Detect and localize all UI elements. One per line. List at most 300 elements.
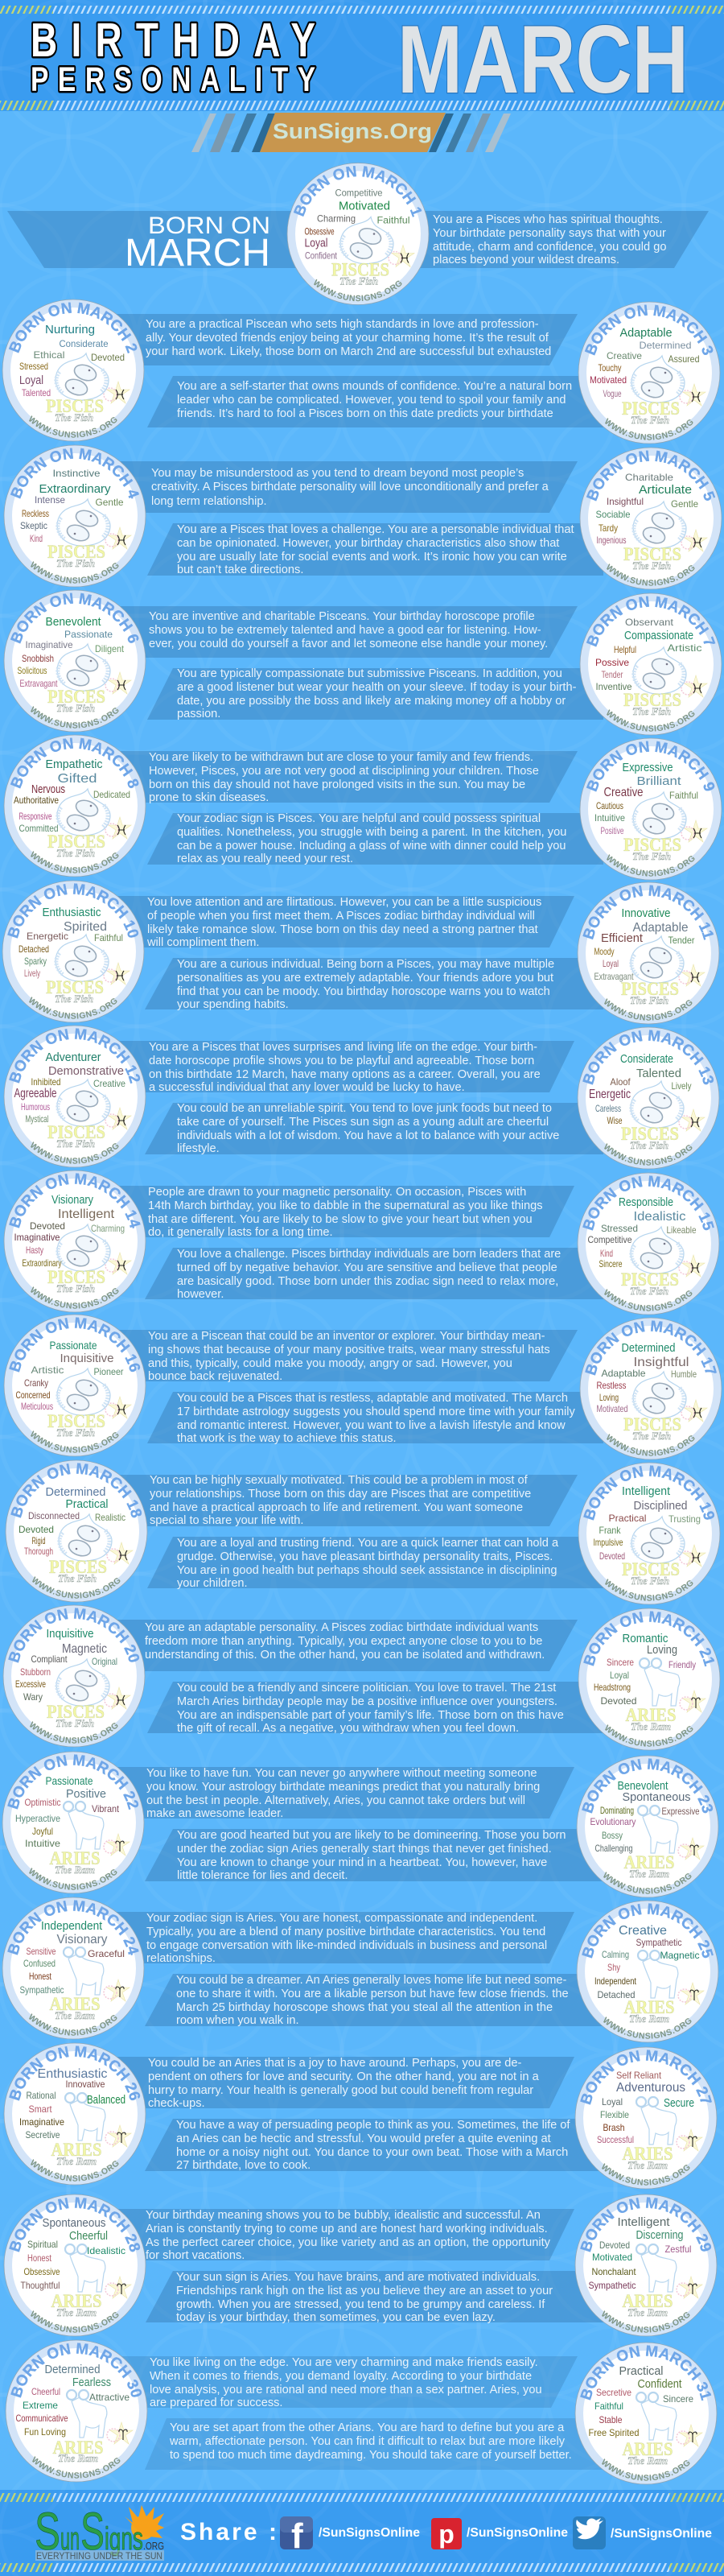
medallion: March 14: The Fish [56, 1282, 95, 1294]
panel: March 1 intro: Your birthdate personality says that with your [433, 227, 666, 240]
traits: Adaptable [632, 921, 689, 935]
panel: March 13 text: lifestyle. [177, 1142, 220, 1155]
panel: March 28 text: Your birthday meaning shows you to be bubbly, idealistic and successful. An [146, 2209, 541, 2222]
panel: March 11 text: your spending habits. [177, 998, 289, 1011]
panel: March 24 text: Typically, you are a blend of many positive birthdate characteristics. You tend [146, 1926, 545, 1938]
traits: Extraordinary [39, 482, 111, 496]
traits: Spirited [64, 920, 107, 934]
traits: Diligent [95, 643, 125, 654]
traits: Stubborn [20, 1666, 51, 1678]
panel: March 20 text [117, 1620, 578, 1671]
traits: Expressive [661, 1806, 700, 1817]
panel: March 22 text: make an awesome leader. [146, 1807, 283, 1820]
traits: Brash [603, 2122, 624, 2133]
traits: Considerate [620, 1052, 673, 1066]
traits [595, 617, 701, 692]
medallion: March 14: WWW.SUNSIGNS.ORG [31, 1286, 119, 1309]
traits: Practical [66, 1497, 108, 1511]
traits: Brilliant [637, 774, 681, 788]
medallion: March 10 [2, 881, 145, 1022]
medallion: March 31: The Ram [627, 2454, 668, 2467]
traits: Frank [599, 1525, 621, 1536]
traits [19, 1485, 125, 1557]
traits: Fun Loving [24, 2426, 66, 2438]
panel: March 17 text: and romantic interest. However, you want to live a lavish lifestyle and know [177, 1419, 566, 1432]
traits: Agreeable [14, 1087, 57, 1100]
medallion: March 8: The Fish [56, 847, 95, 859]
traits: Imaginative [26, 639, 73, 650]
traits: Discerning [636, 2228, 684, 2242]
medallion: March 12: PISCES [47, 1122, 105, 1142]
panel: March 10 text: will compliment them. [146, 936, 259, 949]
medallion: March 25: ARIES [624, 1997, 675, 2017]
traits: Shy [607, 1962, 620, 1973]
panel: March 3 text: You are a self-starter that owns mounds of confidence. You’re a natural born [177, 380, 572, 393]
panel: March 17 text: that work is the way to achieve this status. [177, 1432, 397, 1445]
panel: March 19 text: You are a loyal and trusting friend. You are a quick learner that can hold a [177, 1537, 559, 1550]
panel: March 24 text: Your zodiac sign is Aries. You are honest, compassionate and independent. [146, 1912, 537, 1925]
traits: Zestful [664, 2244, 692, 2255]
traits: Determined [45, 1485, 106, 1499]
panel: March 24 text [117, 1912, 574, 1965]
traits: Humorous [21, 1101, 50, 1113]
panel: March 7 text: date, you are possibly the boss and likely are making money off a hobby or [177, 695, 566, 708]
traits: Cheerful [31, 2386, 60, 2397]
medallion: March 12: The Fish [56, 1137, 95, 1150]
traits: Committed [19, 823, 58, 834]
traits [14, 1193, 125, 1269]
medallion: March 19: BORN ON MARCH 19 [583, 1465, 714, 1521]
title: Birthday Personality: BIRTHDAY [31, 14, 315, 67]
panel: March 7 text: are a good listener but wear your health on your sleeve. If today is your birth- [177, 681, 577, 694]
traits: Inquisitive [60, 1352, 114, 1365]
medallion: March 12: BORN ON MARCH 12 [9, 1028, 140, 1084]
panel: March 18 text: your relationships. Those born on this day are Pisces that are competitive [150, 1488, 531, 1501]
traits: Stable [599, 2414, 623, 2425]
medallion: March 11: WWW.SUNSIGNS.ORG [604, 998, 692, 1021]
medallion: March 6: The Fish [56, 702, 95, 714]
traits [589, 1052, 692, 1126]
traits: Kind [30, 533, 43, 544]
panel: March 29 text: growth. When you are stressed, you tend to be grumpy and careless. If [176, 2298, 545, 2311]
panel: March 29 text [146, 2271, 603, 2324]
panel: March 28 text: Arian is constantly trying to come up and are honest hard working individuals. [146, 2223, 548, 2235]
traits: Humble [671, 1368, 697, 1380]
icon: twitter [573, 2516, 606, 2549]
medallion: March 2 [2, 299, 145, 441]
traits: Energetic [27, 931, 68, 942]
medallion: March 7 [579, 592, 722, 736]
medallion: March 13 [578, 1027, 719, 1169]
medallion: March 7: PISCES [623, 690, 681, 710]
medallion: March 9: BORN ON MARCH 9 [586, 741, 714, 792]
medallion: March 6: PISCES [47, 687, 105, 707]
panel: March 20 text: You are an adaptable personality. A Pisces zodiac birthdate individual wants [145, 1621, 538, 1634]
panel: March 6 text: ever, you could do yourself a favor and let someone else handle your money. [149, 638, 548, 650]
panel: March 16 text: ing shows that because of your many positive traits, wear many stressful hats [148, 1344, 550, 1356]
traits: Vibrant [92, 1803, 120, 1814]
medallion: March 11: The Fish [630, 994, 668, 1006]
traits: Enthusiastic [42, 906, 101, 919]
panel: March 2 text: You are a practical Piscean who sets high standards in love and profession- [146, 318, 539, 331]
panel: March 16 text: You are a Piscean that could be an inventor or explorer. Your birthday mean- [148, 1330, 545, 1343]
medallion: March 9: WWW.SUNSIGNS.ORG [607, 854, 695, 877]
medallion: March 27: The Ram [627, 2159, 668, 2171]
medallion: March 18 [5, 1460, 148, 1602]
medallion: March 30 [6, 2340, 147, 2482]
panel: March 17 text [147, 1392, 603, 1445]
traits: Hasty [26, 1245, 43, 1256]
panel: March 20 text: freedom more than anything. Typically, you expect anyone close to you to be [145, 1635, 542, 1648]
panel: March 15 text: You love a challenge. Pisces birthday individuals are born leaders that are [177, 1248, 561, 1261]
medallion: March 4: The Fish [56, 557, 95, 569]
medallion: March 1 [286, 163, 430, 305]
medallion: March 19 [578, 1462, 721, 1605]
traits: Imaginative [14, 1232, 60, 1243]
traits: Charming [91, 1223, 125, 1234]
traits: Extreme [23, 2400, 58, 2411]
panel: March 10 text: of people when you first meet them. A Pisces zodiac birthday individual will [147, 910, 535, 923]
panel: March 12 text: a successful individual that any lover would be lucky to have. [149, 1081, 465, 1094]
medallion: March 10: The Fish [55, 993, 93, 1005]
traits: Confident [305, 250, 338, 261]
traits: Gentle [671, 498, 698, 510]
medallion: March 29 [575, 2194, 717, 2336]
traits: Lively [24, 968, 40, 979]
traits: Motivated [590, 374, 627, 386]
traits: Evolutionary [590, 1816, 636, 1827]
traits: Practical [619, 2364, 663, 2378]
traits [590, 326, 700, 399]
logo: SunSigns.org: Signs [80, 2501, 143, 2561]
medallion: March 18: The Fish [58, 1572, 97, 1584]
panel: March 15 text: however. [177, 1288, 224, 1301]
traits [595, 472, 698, 546]
traits: Disconnected [28, 1510, 80, 1521]
traits [15, 1627, 117, 1703]
traits: Motivated [597, 1403, 627, 1414]
traits: Inventive [595, 681, 632, 692]
panel: March 27 text: home or a noisy night out. You dance to your own beat. Those with a March [176, 2146, 568, 2159]
traits: Loyal [603, 958, 619, 969]
panel: March 21 text: March Aries birthday people may be a positive influence over youngsters. [177, 1695, 557, 1708]
traits: Secure [664, 2096, 694, 2110]
medallion: March 8: BORN ON MARCH 8 [10, 737, 138, 789]
traits: Independent [41, 1919, 103, 1933]
medallion: March 20: WWW.SUNSIGNS.ORG [30, 1721, 117, 1744]
traits [14, 758, 130, 834]
medallion: March 9: The Fish [632, 850, 671, 862]
panel: March 10 text [117, 896, 574, 949]
panel: March 23 text [145, 1829, 603, 1882]
medallion: March 13: BORN ON MARCH 13 [582, 1030, 714, 1085]
traits: Detached [19, 943, 49, 955]
traits: Positive [600, 825, 624, 836]
panel: March 19 text [147, 1537, 603, 1590]
medallion: March 6: WWW.SUNSIGNS.ORG [31, 706, 119, 729]
medallion: March 21: WWW.SUNSIGNS.ORG [603, 1724, 696, 1749]
traits: Idealistic [634, 1210, 685, 1224]
panel: March 21 text [147, 1682, 603, 1735]
medallion: March 28: BORN ON MARCH 28 [6, 2194, 143, 2254]
traits: Joyful [32, 1826, 53, 1837]
medallion: March 15: PISCES [621, 1269, 679, 1290]
traits: Innovative [621, 906, 671, 920]
traits: Dedicated [93, 789, 130, 800]
traits [589, 2364, 693, 2438]
traits: Visionary [51, 1193, 93, 1207]
medallion: March 6: BORN ON MARCH 6 [10, 592, 138, 644]
traits: Confident [637, 2377, 682, 2391]
medallion: March 14 [3, 1170, 146, 1312]
label: pinterest handle: /SunSignsOnline [467, 2526, 568, 2540]
traits: Thoughtful [21, 2280, 60, 2291]
traits [590, 1779, 700, 1854]
traits: Determined [621, 1341, 676, 1355]
icon: facebook: f [291, 2516, 303, 2556]
panel: March 24 text: relationships. [146, 1952, 216, 1965]
medallion: March 3: PISCES [622, 398, 680, 419]
medallion: March 10: WWW.SUNSIGNS.ORG [29, 997, 117, 1019]
panel: March 9 text: qualities. Nonetheless, you struggle with being a parent. In the kitchen, you [177, 826, 566, 839]
medallion: March 20: BORN ON MARCH 20 [8, 1608, 140, 1663]
medallion: March 16 [3, 1314, 146, 1457]
icon: pinterest: p [438, 2520, 455, 2549]
medallion: March 22 [2, 1752, 145, 1893]
traits: Adaptable [602, 1368, 646, 1379]
traits: Benevolent [45, 615, 101, 629]
traits: Intelligent [618, 2215, 670, 2229]
traits: Hyperactive [15, 1813, 60, 1824]
traits: Balanced [87, 2093, 125, 2107]
panel: March 1 intro: You are a Pisces who has spiritual thoughts. [433, 213, 663, 226]
panel: March 8 text: born on this day should not have prolonged visits in the sun. You may be [149, 778, 525, 791]
icon: facebook [280, 2516, 313, 2556]
medallion: March 9: PISCES [623, 835, 681, 855]
panel: March 15 text: turned off by negative behavior. You are sensitive and believe that people [177, 1261, 557, 1274]
medallion: March 9 [579, 737, 722, 881]
traits: Cautious [596, 800, 623, 811]
traits: Intense [35, 494, 65, 506]
label: facebook handle: /SunSignsOnline [319, 2526, 420, 2540]
traits: Faithful [376, 214, 410, 225]
label: twitter handle: /SunSignsOnline [611, 2527, 712, 2541]
panel: March 14 text: People are drawn to your magnetic personality. On occasion, Pisces with [148, 1186, 526, 1199]
medallion: March 18: WWW.SUNSIGNS.ORG [32, 1576, 121, 1599]
medallion: March 24: WWW.SUNSIGNS.ORG [27, 2013, 120, 2038]
medallion: March 20: The Fish [56, 1717, 94, 1729]
traits: Determined [45, 2363, 100, 2376]
panel: March 29 text: Friendships rank high on the list as you believe they are an asset to your [176, 2285, 553, 2297]
traits: Gentle [95, 497, 124, 508]
traits [594, 906, 695, 982]
traits: Loving [599, 1392, 619, 1403]
panel: March 2 text: ally. Your devoted friends enjoy being at your charming home. It’s the result of [146, 332, 549, 345]
traits: Creative [619, 1924, 667, 1938]
traits: Sympathetic [19, 1984, 64, 1996]
medallion: March 17: BORN ON MARCH 17 [585, 1320, 717, 1376]
medallion: March 21: BORN ON MARCH 21 [581, 1608, 718, 1668]
medallion: March 17: PISCES [623, 1414, 681, 1435]
panel: March 21 text: You could be a friendly and sincere politician. You love to travel. The 21st [177, 1682, 556, 1695]
traits: Adventurer [45, 1051, 101, 1064]
medallion: March 31: WWW.SUNSIGNS.ORG [599, 2458, 693, 2483]
footer band [0, 2490, 724, 2576]
medallion: March 11 [578, 882, 719, 1024]
medallion: March 27: ARIES [623, 2144, 673, 2164]
medallion: March 23 [576, 1755, 719, 1898]
medallion: March 7: BORN ON MARCH 7 [586, 596, 716, 647]
traits: Faithful [94, 932, 123, 943]
traits: Original [92, 1656, 117, 1667]
medallion: March 30: ARIES [53, 2438, 104, 2458]
traits [597, 2070, 694, 2145]
traits: Helpful [614, 644, 636, 655]
panel: March 20 text: understanding of this. On the other hand, you can be isolated and withdrawn. [145, 1649, 545, 1662]
traits: Wise [607, 1115, 623, 1126]
panel: March 25 text [145, 1974, 603, 2027]
panel: March 29 text: Your sun sign is Aries. You have brains, and are motivated individuals. [176, 2271, 540, 2284]
panel: March 19 text: your children. [177, 1577, 248, 1590]
traits [597, 1341, 697, 1414]
traits [594, 1924, 700, 2000]
medallion: March 26: BORN ON MARCH 26 [6, 2043, 143, 2103]
medallion: March 17: The Fish [632, 1430, 671, 1442]
traits: Obsessive [304, 225, 335, 237]
panel: March 22 text [117, 1767, 574, 1820]
traits: Faithful [669, 790, 698, 801]
medallion: March 20 [3, 1605, 145, 1747]
medallion: March 31 [575, 2343, 717, 2484]
traits: Nervous [31, 782, 65, 796]
panel: March 24 text: to engage conversation with like-minded individuals in business and personal [146, 1939, 547, 1952]
traits: Communicative [16, 2413, 68, 2424]
panel: March 31 text: warm, affectionate person. You can find it difficult to relax but are more likely [169, 2435, 566, 2448]
medallion: March 16: WWW.SUNSIGNS.ORG [31, 1430, 119, 1453]
traits: Realistic [95, 1512, 125, 1523]
traits: Artistic [31, 1364, 64, 1376]
medallion: March 26: ARIES [51, 2140, 102, 2160]
medallion: March 31: BORN ON MARCH 31 [578, 2343, 714, 2402]
traits: Adaptable [619, 326, 673, 340]
traits: Lively [671, 1080, 692, 1092]
traits: Insightful [607, 496, 644, 507]
traits: Instinctive [52, 468, 101, 479]
medallion: March 2: The Fish [55, 411, 93, 423]
medallion: March 4: BORN ON MARCH 4 [10, 448, 139, 499]
traits: Secretive [596, 2387, 631, 2398]
heading: Born on March [125, 213, 270, 275]
medallion: March 25 [576, 1900, 719, 2043]
title: Birthday Personality [31, 14, 315, 99]
medallion: March 2: WWW.SUNSIGNS.ORG [29, 415, 117, 438]
panel: March 1 intro: places beyond your wildest dreams. [433, 254, 619, 266]
traits: Enthusiastic [37, 2067, 108, 2081]
medallion: March 11: BORN ON MARCH 11 [582, 885, 714, 940]
traits: Sociable [595, 509, 631, 520]
traits: Charitable [625, 472, 673, 483]
medallion: March 1: PISCES [331, 259, 389, 280]
traits: Sympathetic [636, 1937, 682, 1948]
traits: Sincere [607, 1657, 634, 1668]
traits [18, 615, 125, 689]
panel: March 5 text [147, 523, 603, 576]
traits: Excessive [15, 1678, 46, 1690]
traits: Magnetic [660, 1950, 700, 1961]
medallion: March 27: WWW.SUNSIGNS.ORG [599, 2162, 693, 2188]
traits: Gifted [58, 772, 97, 786]
medallion: March 30: BORN ON MARCH 30 [8, 2340, 145, 2400]
panel: March 8 text: You are likely to be withdrawn but are close to your family and few friends. [149, 751, 533, 764]
traits: Charming [317, 213, 356, 224]
medallion: March 6 [3, 589, 146, 733]
traits: Motivated [339, 200, 390, 213]
medallion: March 8: PISCES [47, 832, 105, 852]
heading: Born on March: BORN ON [148, 213, 270, 239]
panel: March 25 text: March 25 birthday horoscope shows that you steal all the attention in the [176, 2001, 553, 2014]
logo: SunSigns.org: EVERYTHING UNDER THE SUN [36, 2550, 162, 2562]
medallion: March 29: BORN ON MARCH 29 [578, 2194, 714, 2254]
medallion: March 29: ARIES [623, 2291, 673, 2311]
traits: Loyal [602, 2096, 623, 2107]
medallion: March 10: PISCES [46, 977, 104, 997]
traits: Inhibited [31, 1076, 61, 1088]
traits [589, 2215, 692, 2291]
panel: March 14 text: that are different. You are likely to be slow to give your heart but when you [148, 1213, 533, 1226]
traits: Efficient [601, 931, 644, 945]
traits: Challenging [595, 1843, 632, 1854]
traits: Artistic [668, 642, 701, 654]
medallion: March 20: PISCES [47, 1702, 105, 1722]
medallion: March 23: BORN ON MARCH 23 [579, 1756, 716, 1815]
traits: Demonstrative [48, 1064, 124, 1078]
traits: Honest [27, 2252, 52, 2264]
medallion: March 7: WWW.SUNSIGNS.ORG [607, 709, 695, 732]
panel: March 7 text [147, 667, 603, 720]
traits [587, 1195, 697, 1269]
traits: Observant [625, 617, 674, 628]
site badge: SunSigns.Org: SunSigns.Org [273, 119, 432, 143]
medallion: March 1: BORN ON MARCH 1 [293, 166, 422, 217]
panel: March 8 text: prone to skin diseases. [149, 791, 269, 804]
panel: March 23 text: little tolerance for lies and deceit. [177, 1869, 348, 1882]
medallion: March 16: PISCES [47, 1411, 105, 1431]
traits: Obsessive [24, 2266, 60, 2277]
panel: March 4 text: creativity. A Pisces birthdate personality will love unconditionally and prefer a [151, 481, 549, 493]
panel: March 30 text: You like living on the edge. You are very charming and make friends easily. [150, 2356, 538, 2369]
traits: Articulate [639, 483, 692, 497]
medallion: March 21: ARIES [626, 1705, 677, 1725]
medallion: March 16: The Fish [56, 1426, 95, 1439]
medallion: March 28: WWW.SUNSIGNS.ORG [28, 2310, 121, 2335]
panel: March 26 text: hurry to marry. Your health is generally good but could benefit from regular [148, 2084, 533, 2097]
traits: Devoted [599, 2240, 630, 2251]
panel: March 30 text: When it comes to friends, you demand loyalty. According to your birthdate [150, 2370, 532, 2383]
panel: March 22 text: You like to have fun. You can never go anywhere without meeting someone [146, 1767, 537, 1780]
medallion: March 19: WWW.SUNSIGNS.ORG [605, 1579, 693, 1601]
panel: March 26 text: check-ups. [148, 2097, 205, 2110]
traits: Moody [594, 946, 615, 957]
medallion: March 1: WWW.SUNSIGNS.ORG [314, 279, 402, 301]
medallion: March 21 [578, 1608, 721, 1750]
medallion: March 22: The Ram [55, 1864, 95, 1876]
traits: Dominating [600, 1805, 634, 1816]
medallion: March 22: BORN ON MARCH 22 [5, 1752, 142, 1811]
traits: Pioneer [93, 1366, 124, 1377]
medallion: March 5: WWW.SUNSIGNS.ORG [607, 564, 695, 586]
traits: Spiritual [27, 2239, 58, 2250]
traits: Independent [594, 1975, 637, 1987]
